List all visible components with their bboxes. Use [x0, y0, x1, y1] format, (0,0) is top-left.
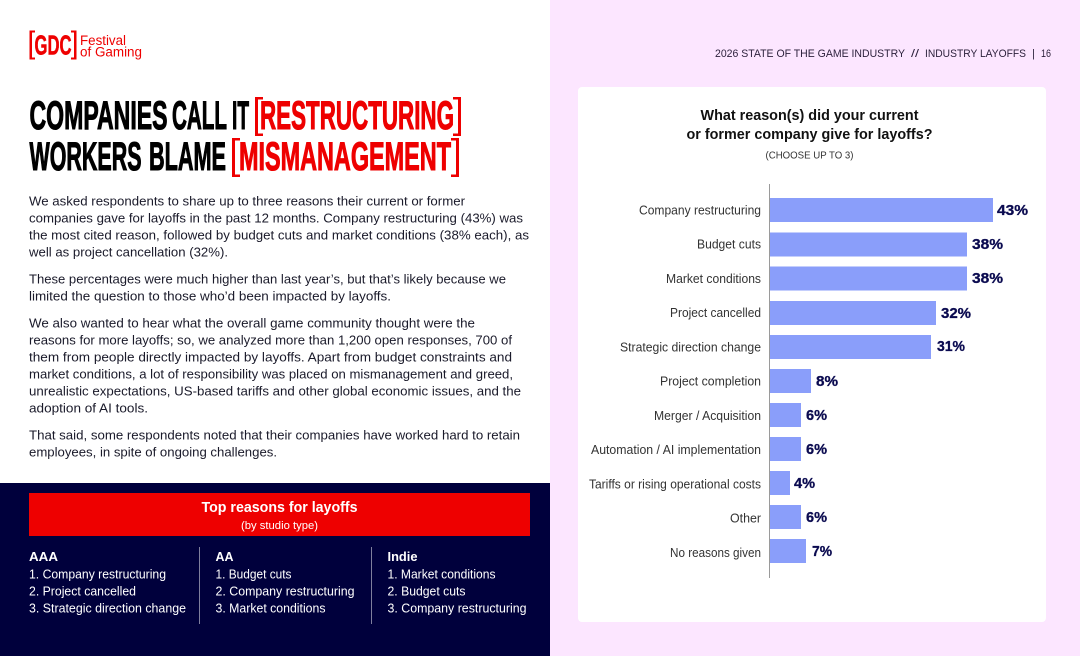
page header	[715, 48, 1051, 60]
page header: 16	[1041, 48, 1051, 60]
body text	[28, 194, 529, 460]
body text: We also wanted to hear what the overall game community thought were the	[29, 316, 475, 330]
bar chart: 32%	[941, 305, 971, 322]
column: AAA	[29, 550, 186, 616]
bar chart: 43%	[997, 202, 1028, 219]
chart heading: What reason(s) did your current	[700, 108, 919, 124]
body text: companies gave for layoffs in the past 12 months. Company restructuring (43%) was	[29, 210, 523, 226]
title: RESTRUCTURING	[260, 94, 454, 138]
body text: We asked respondents to share up to three reasons their current or former	[29, 194, 466, 208]
bar chart	[589, 184, 1028, 578]
column: AA	[216, 550, 355, 616]
column: Indie: Indie	[388, 550, 418, 564]
title: MISMANAGEMENT	[239, 135, 451, 179]
title: CALL	[172, 94, 227, 138]
bar chart: Project cancelled	[670, 306, 761, 320]
bar chart: Merger / Acquisition	[654, 409, 761, 423]
body text: reasons for more layoffs; so, we analyzed more than 1,200 open responses, 700 of	[29, 332, 512, 348]
logo: GDC Festival of Gaming: of Gaming	[80, 44, 142, 60]
logo: GDC Festival of Gaming	[30, 30, 142, 60]
red heading banner: Top reasons for layoffs	[202, 500, 358, 516]
body text: well as project cancellation (32%).	[28, 244, 228, 260]
column: Indie: 3. Company restructuring	[388, 602, 527, 616]
page header: |	[1032, 48, 1035, 60]
body text: unrealistic expectations, US-based tariffs and other global economic issues, and the	[29, 384, 521, 398]
chart heading: or former company give for layoffs?	[686, 127, 933, 143]
column: AA: AA	[216, 550, 234, 564]
bar chart: 6%	[806, 509, 827, 526]
title: COMPANIES	[30, 94, 168, 138]
bar chart: No reasons given	[670, 546, 761, 560]
bar chart: Market conditions	[666, 272, 761, 286]
title	[30, 94, 461, 179]
chart heading	[686, 108, 933, 162]
body text: That said, some respondents noted that their companies have worked hard to retain	[29, 428, 520, 442]
chart heading: (CHOOSE UP TO 3)	[766, 150, 854, 162]
column: Indie: 1. Market conditions	[388, 568, 496, 582]
panel: top reasons for layoffs	[0, 483, 550, 656]
page header: INDUSTRY LAYOFFS	[925, 48, 1026, 60]
bar chart: 38%	[972, 270, 1003, 287]
bar chart: Automation / AI implementation	[591, 443, 761, 457]
bar chart: 7%	[812, 543, 832, 560]
body text: the most cited reason, followed by budget cuts and market conditions (38% each), as	[29, 228, 529, 242]
bar chart: 8%	[816, 373, 838, 390]
column: AA: 3. Market conditions	[216, 602, 326, 616]
bar chart: Project completion	[660, 374, 761, 388]
column: AA: 2. Company restructuring	[216, 584, 355, 598]
body text: market conditions, a lot of responsibility was placed on mismanagement and greed,	[29, 366, 513, 382]
logo: GDC Festival of Gaming: GDC	[34, 30, 72, 60]
body text: them from people directly impacted by layoffs. Apart from budget constraints and	[29, 350, 512, 364]
column: Indie	[388, 550, 527, 616]
title: WORKERS	[30, 135, 142, 179]
bar chart: 31%	[937, 338, 965, 355]
bar chart: Tariffs or rising operational costs	[589, 478, 761, 492]
bar chart: Other	[730, 512, 761, 526]
body text: adoption of AI tools.	[29, 400, 148, 416]
page header: 2026 STATE OF THE GAME INDUSTRY	[715, 48, 906, 60]
column: AAA: 1. Company restructuring	[29, 568, 166, 582]
bar chart: 38%	[972, 236, 1003, 253]
title: IT	[232, 94, 249, 138]
column: AAA: 3. Strategic direction change	[29, 602, 186, 616]
bar chart: Budget cuts	[697, 238, 761, 252]
column: AAA: 2. Project cancelled	[29, 584, 136, 598]
red heading banner: (by studio type)	[241, 520, 318, 532]
column: Indie: 2. Budget cuts	[388, 584, 466, 598]
right page background	[550, 0, 1080, 656]
panel: bar chart card	[578, 87, 1046, 622]
bar chart: Company restructuring	[639, 204, 761, 218]
bar chart: Strategic direction change	[620, 340, 761, 354]
bar chart: 4%	[794, 475, 815, 492]
red heading banner	[29, 493, 530, 536]
body text: These percentages were much higher than last year’s, but that’s likely because we	[29, 272, 506, 286]
body text: limited the question to those who’d been impacted by layoffs.	[29, 288, 391, 304]
body text: employees, in spite of ongoing challenges.	[29, 444, 277, 460]
bar chart: 6%	[806, 441, 827, 458]
column: AAA: AAA	[29, 550, 58, 564]
logo: GDC Festival of Gaming: Festival	[80, 33, 126, 48]
bar chart: 6%	[806, 407, 827, 424]
title: BLAME	[149, 135, 226, 179]
column: AA: 1. Budget cuts	[216, 568, 292, 582]
page header: //	[911, 48, 920, 60]
